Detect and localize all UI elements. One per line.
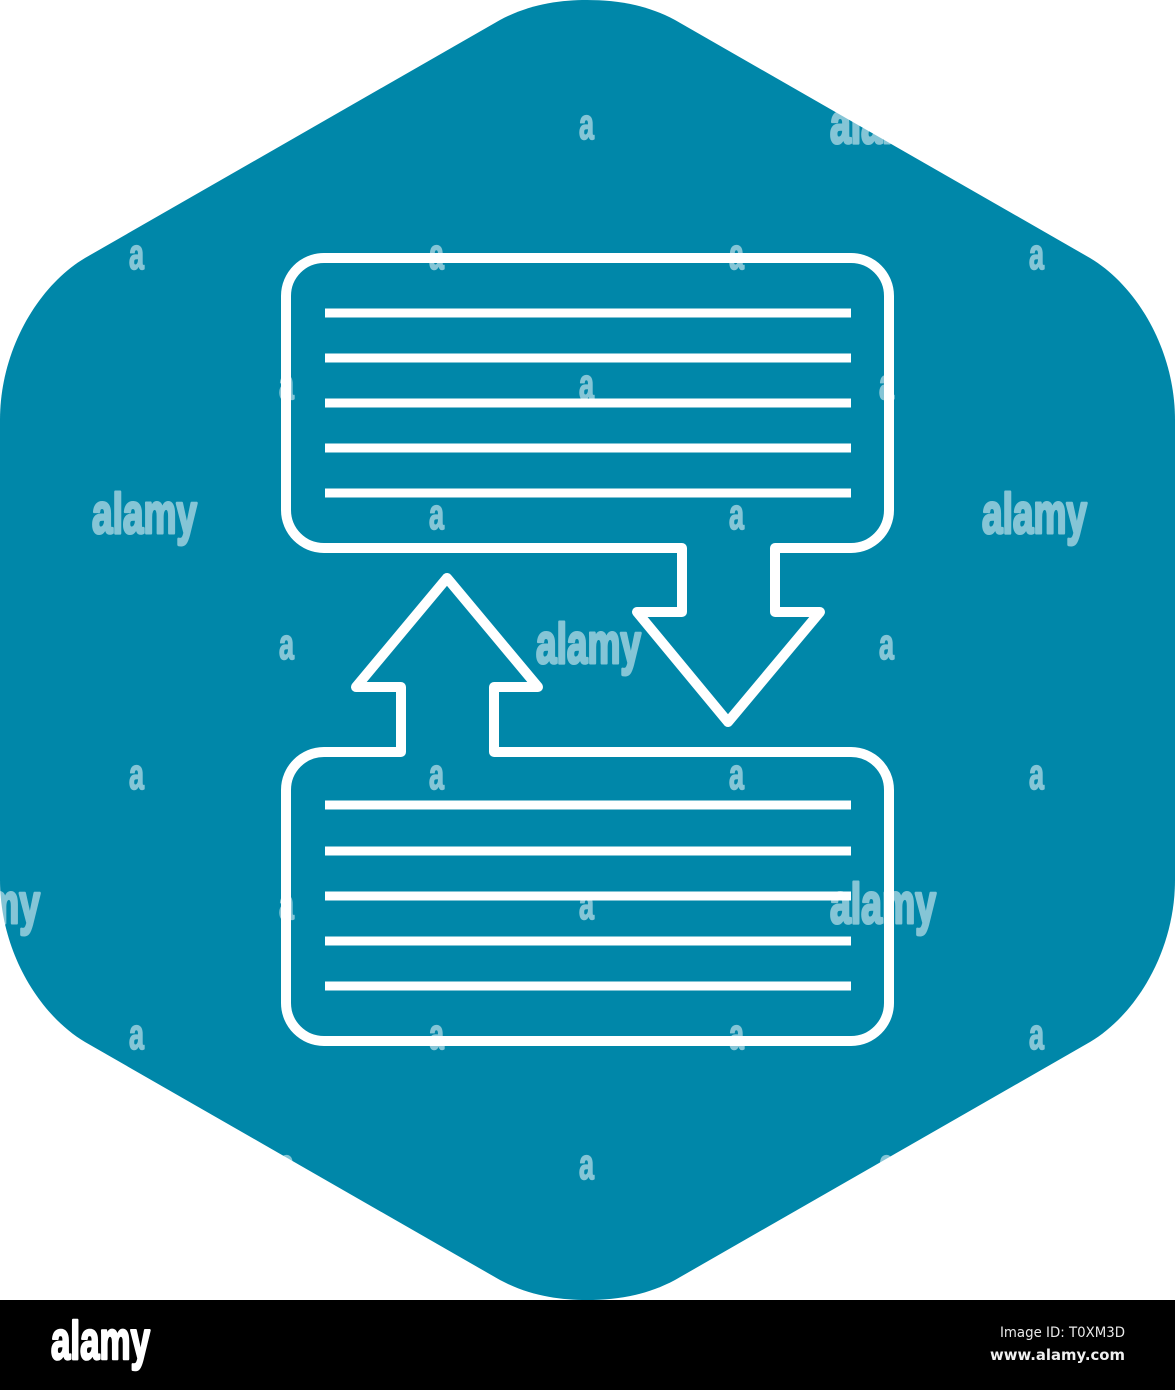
small watermark letters: a: [879, 1140, 894, 1189]
small watermark letters: a: [579, 1140, 594, 1189]
small watermark letters: a: [1029, 1010, 1044, 1059]
website: www.alamy.com: [990, 1346, 1125, 1364]
small watermark letters: a: [729, 750, 744, 799]
large watermark words: alamy: [830, 92, 936, 156]
small watermark letters: a: [729, 490, 744, 539]
large watermark words: alamy: [536, 612, 641, 676]
small watermark letters: a: [129, 1010, 144, 1059]
small watermark letters: a: [579, 100, 594, 149]
small watermark letters: a: [729, 230, 744, 279]
small watermark letters: a: [279, 360, 294, 409]
small watermark letters: a: [129, 230, 144, 279]
small watermark letters: a: [579, 880, 594, 929]
bottom box text lines: [325, 805, 851, 986]
small watermark letters: a: [279, 1140, 294, 1189]
small watermark letters: a: [429, 230, 444, 279]
large watermark words: alamy: [982, 482, 1087, 546]
small watermark letters: a: [879, 360, 894, 409]
small watermark letters: a: [1029, 750, 1044, 799]
image id: Image ID: T0XM3D: [1000, 1325, 1125, 1341]
footer bar: [0, 1300, 1175, 1390]
large watermark words: alamy: [830, 872, 936, 936]
top box text lines: [325, 313, 851, 493]
bottom text box with up arrow: [286, 578, 889, 1041]
small watermark letters: a: [129, 750, 144, 799]
footer logo: alamy: [51, 1311, 150, 1371]
small watermark letters: a: [279, 620, 294, 669]
flow diagram icon: [286, 258, 889, 1041]
small watermark letters: a: [1029, 230, 1044, 279]
top text box with down arrow: [286, 258, 889, 722]
small watermark letters: a: [429, 490, 444, 539]
small watermark letters: a: [279, 880, 294, 929]
small watermark letters: a: [729, 1010, 744, 1059]
small watermark letters: a: [879, 620, 894, 669]
small watermark letters: [129, 100, 1044, 1189]
large watermark words: alamy: [92, 482, 197, 546]
small watermark letters: a: [579, 360, 594, 409]
small watermark letters: a: [429, 750, 444, 799]
small watermark letters: a: [429, 1010, 444, 1059]
large watermark words: [0, 92, 1087, 936]
